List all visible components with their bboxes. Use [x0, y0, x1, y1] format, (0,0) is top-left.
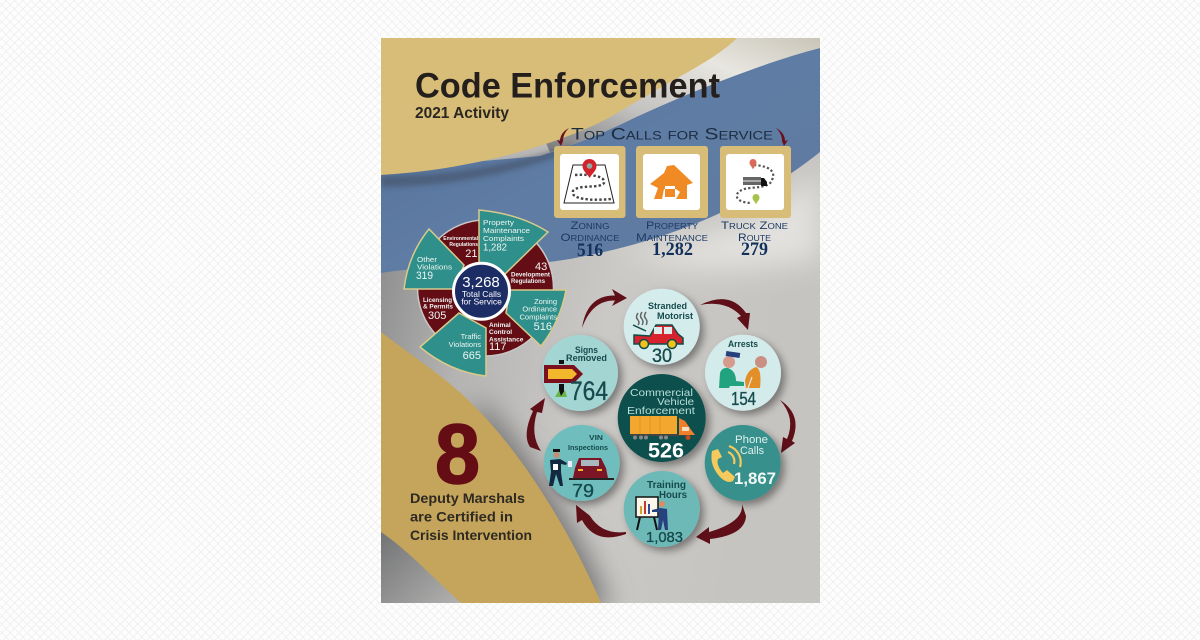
label: zoning ordinance complaints: Complaints: [519, 312, 557, 322]
label: animal control assistance: [489, 322, 524, 353]
card: truck zone route: [720, 146, 791, 218]
label: other violations: [416, 255, 452, 282]
label: zoning ordinance complaints: [519, 297, 557, 333]
callout text: [410, 490, 532, 543]
icon: map pin on plot: [564, 159, 614, 203]
circle: arrests: Arrests: [728, 339, 758, 350]
icon: truck route: [737, 159, 773, 204]
icon: road sign: [544, 360, 583, 397]
circle: commercial vehicle enforcement: Vehicle: [657, 396, 694, 408]
label: other violations: Violations: [417, 262, 452, 272]
label: property maintenance complaints: 1,282: [483, 242, 507, 254]
label: traffic violations: 665: [463, 350, 481, 362]
wedge: other violations: [404, 229, 464, 289]
callout text: Deputy Marshals: [410, 490, 525, 506]
label: environmental regulations: 21: [465, 248, 478, 260]
icon: officer and car: [549, 449, 614, 486]
circle: signs removed: [542, 335, 618, 411]
label: development regulations: Regulations: [511, 279, 546, 285]
label: licensing and permits: & Permits: [423, 304, 453, 310]
circle: phone calls: Calls: [740, 445, 764, 457]
label: zoning ordinance: [560, 220, 620, 261]
label: environmental regulations: Environmental: [443, 236, 479, 242]
center total: [454, 263, 510, 319]
icon: officer and detainee: [719, 351, 767, 391]
label: zoning ordinance: Ordinance: [560, 232, 620, 244]
big number 8: 8: [435, 407, 480, 501]
label: animal control assistance: Control: [489, 329, 512, 336]
circle: signs removed: 764: [570, 376, 608, 406]
circle: commercial vehicle enforcement: 526: [648, 440, 684, 462]
label: truck zone route: Route: [738, 232, 771, 244]
icon: truck: [630, 416, 695, 440]
dark lower-left corner: [381, 532, 460, 603]
label: truck zone route: 279: [741, 239, 768, 260]
blue swoosh: [381, 48, 820, 273]
light swoosh behind gold: [540, 38, 820, 152]
dark wedges disc: [418, 220, 554, 356]
circle: arrests: 154: [731, 389, 756, 409]
label: traffic violations: Violations: [449, 340, 481, 349]
label: development regulations: [511, 261, 550, 285]
circle: phone calls: Phone: [735, 434, 768, 446]
label: zoning ordinance: Zoning: [570, 220, 610, 232]
poster background: [381, 38, 820, 610]
icon: presenter at board: [636, 497, 668, 530]
circle: stranded motorist: Stranded: [648, 301, 687, 312]
circle: stranded motorist: Motorist: [657, 311, 694, 322]
circle: training hours: [624, 471, 700, 547]
icon: orange house: [650, 165, 693, 199]
label: property maintenance complaints: Property: [483, 218, 514, 227]
label: animal control assistance: 117: [489, 341, 507, 353]
circle: arrests: [705, 335, 781, 411]
circle: phone calls: 1,867: [734, 469, 776, 488]
label: property maintenance complaints: Maintenance: [483, 226, 530, 235]
circle: phone calls: [705, 425, 781, 501]
label: truck zone route: Truck Zone: [721, 220, 788, 232]
label: zoning ordinance complaints: 516: [534, 321, 552, 333]
label: property maintenance: Property: [646, 220, 699, 232]
card: property maintenance: [636, 146, 708, 218]
circle: vin inspections: 79: [572, 481, 594, 501]
title: Code Enforcement: [415, 66, 720, 106]
circle: vin inspections: [544, 425, 620, 501]
callout: deputy marshals: [410, 407, 532, 543]
label: licensing and permits: [423, 297, 453, 322]
circle: stranded motorist: 30: [652, 346, 672, 367]
heading: Top Calls for Service: [571, 124, 773, 144]
circle: signs removed: Signs: [575, 345, 598, 356]
label: property maintenance complaints: [483, 218, 530, 254]
wedge: property maintenance: [479, 210, 548, 274]
circle: training hours: 1,083: [646, 529, 683, 546]
label: development regulations: Development: [511, 272, 550, 278]
center total: Total Calls: [462, 289, 501, 299]
label: property maintenance complaints: Complaints: [483, 234, 524, 243]
center total: for Service: [461, 296, 502, 306]
circle: vin inspections: Inspections: [568, 443, 608, 452]
callout text: Crisis Intervention: [410, 527, 532, 543]
callout text: are Certified in: [410, 508, 513, 524]
circle: commercial vehicle enforcement: Enforcement: [627, 405, 695, 417]
label: other violations: 319: [416, 270, 433, 282]
wedge: zoning: [506, 290, 566, 346]
bracket arrows: [557, 128, 788, 146]
circle: training hours: Hours: [659, 490, 687, 501]
gold lower shape: [381, 332, 601, 603]
label: environmental regulations: Regulations: [449, 242, 478, 248]
circle: commercial vehicle enforcement: Commercial: [630, 387, 693, 399]
label: property maintenance: Maintenance: [636, 232, 708, 244]
label: property maintenance: 1,282: [652, 239, 693, 260]
circle: training hours: Training: [647, 480, 686, 491]
chart: total calls pinwheel: [404, 210, 566, 376]
label: environmental regulations: [443, 236, 479, 260]
label: zoning ordinance complaints: Zoning: [534, 297, 557, 306]
label: traffic violations: Traffic: [461, 332, 481, 341]
label: other violations: Other: [417, 255, 438, 264]
wedge: traffic: [420, 313, 486, 376]
label: traffic violations: [449, 332, 481, 362]
label: zoning ordinance: 516: [577, 240, 603, 261]
subtitle: 2021 Activity: [415, 105, 509, 122]
label: licensing and permits: 305: [428, 310, 446, 322]
gold top shape: [381, 38, 737, 175]
icon: broken-down car: [633, 312, 683, 348]
arrows: [527, 289, 796, 544]
label: animal control assistance: Animal: [489, 322, 511, 329]
circle: stranded motorist: [624, 289, 700, 367]
label: property maintenance: [636, 220, 708, 260]
panel: top calls for service: [554, 124, 791, 261]
label: truck zone route: [721, 220, 788, 260]
label: zoning ordinance complaints: Ordinance: [522, 304, 557, 314]
label: development regulations: 43: [535, 261, 547, 273]
icon: phone: [711, 446, 741, 482]
activity cycle: [527, 289, 796, 547]
center total: 3,268: [462, 274, 500, 291]
card: zoning ordinance: [554, 146, 626, 218]
label: animal control assistance: Assistance: [489, 336, 524, 344]
circle: commercial vehicle enforcement: [618, 374, 706, 462]
circle: signs removed: Removed: [566, 353, 607, 364]
circle: vin inspections: VIN: [589, 433, 603, 442]
label: licensing and permits: Licensing: [423, 297, 452, 304]
